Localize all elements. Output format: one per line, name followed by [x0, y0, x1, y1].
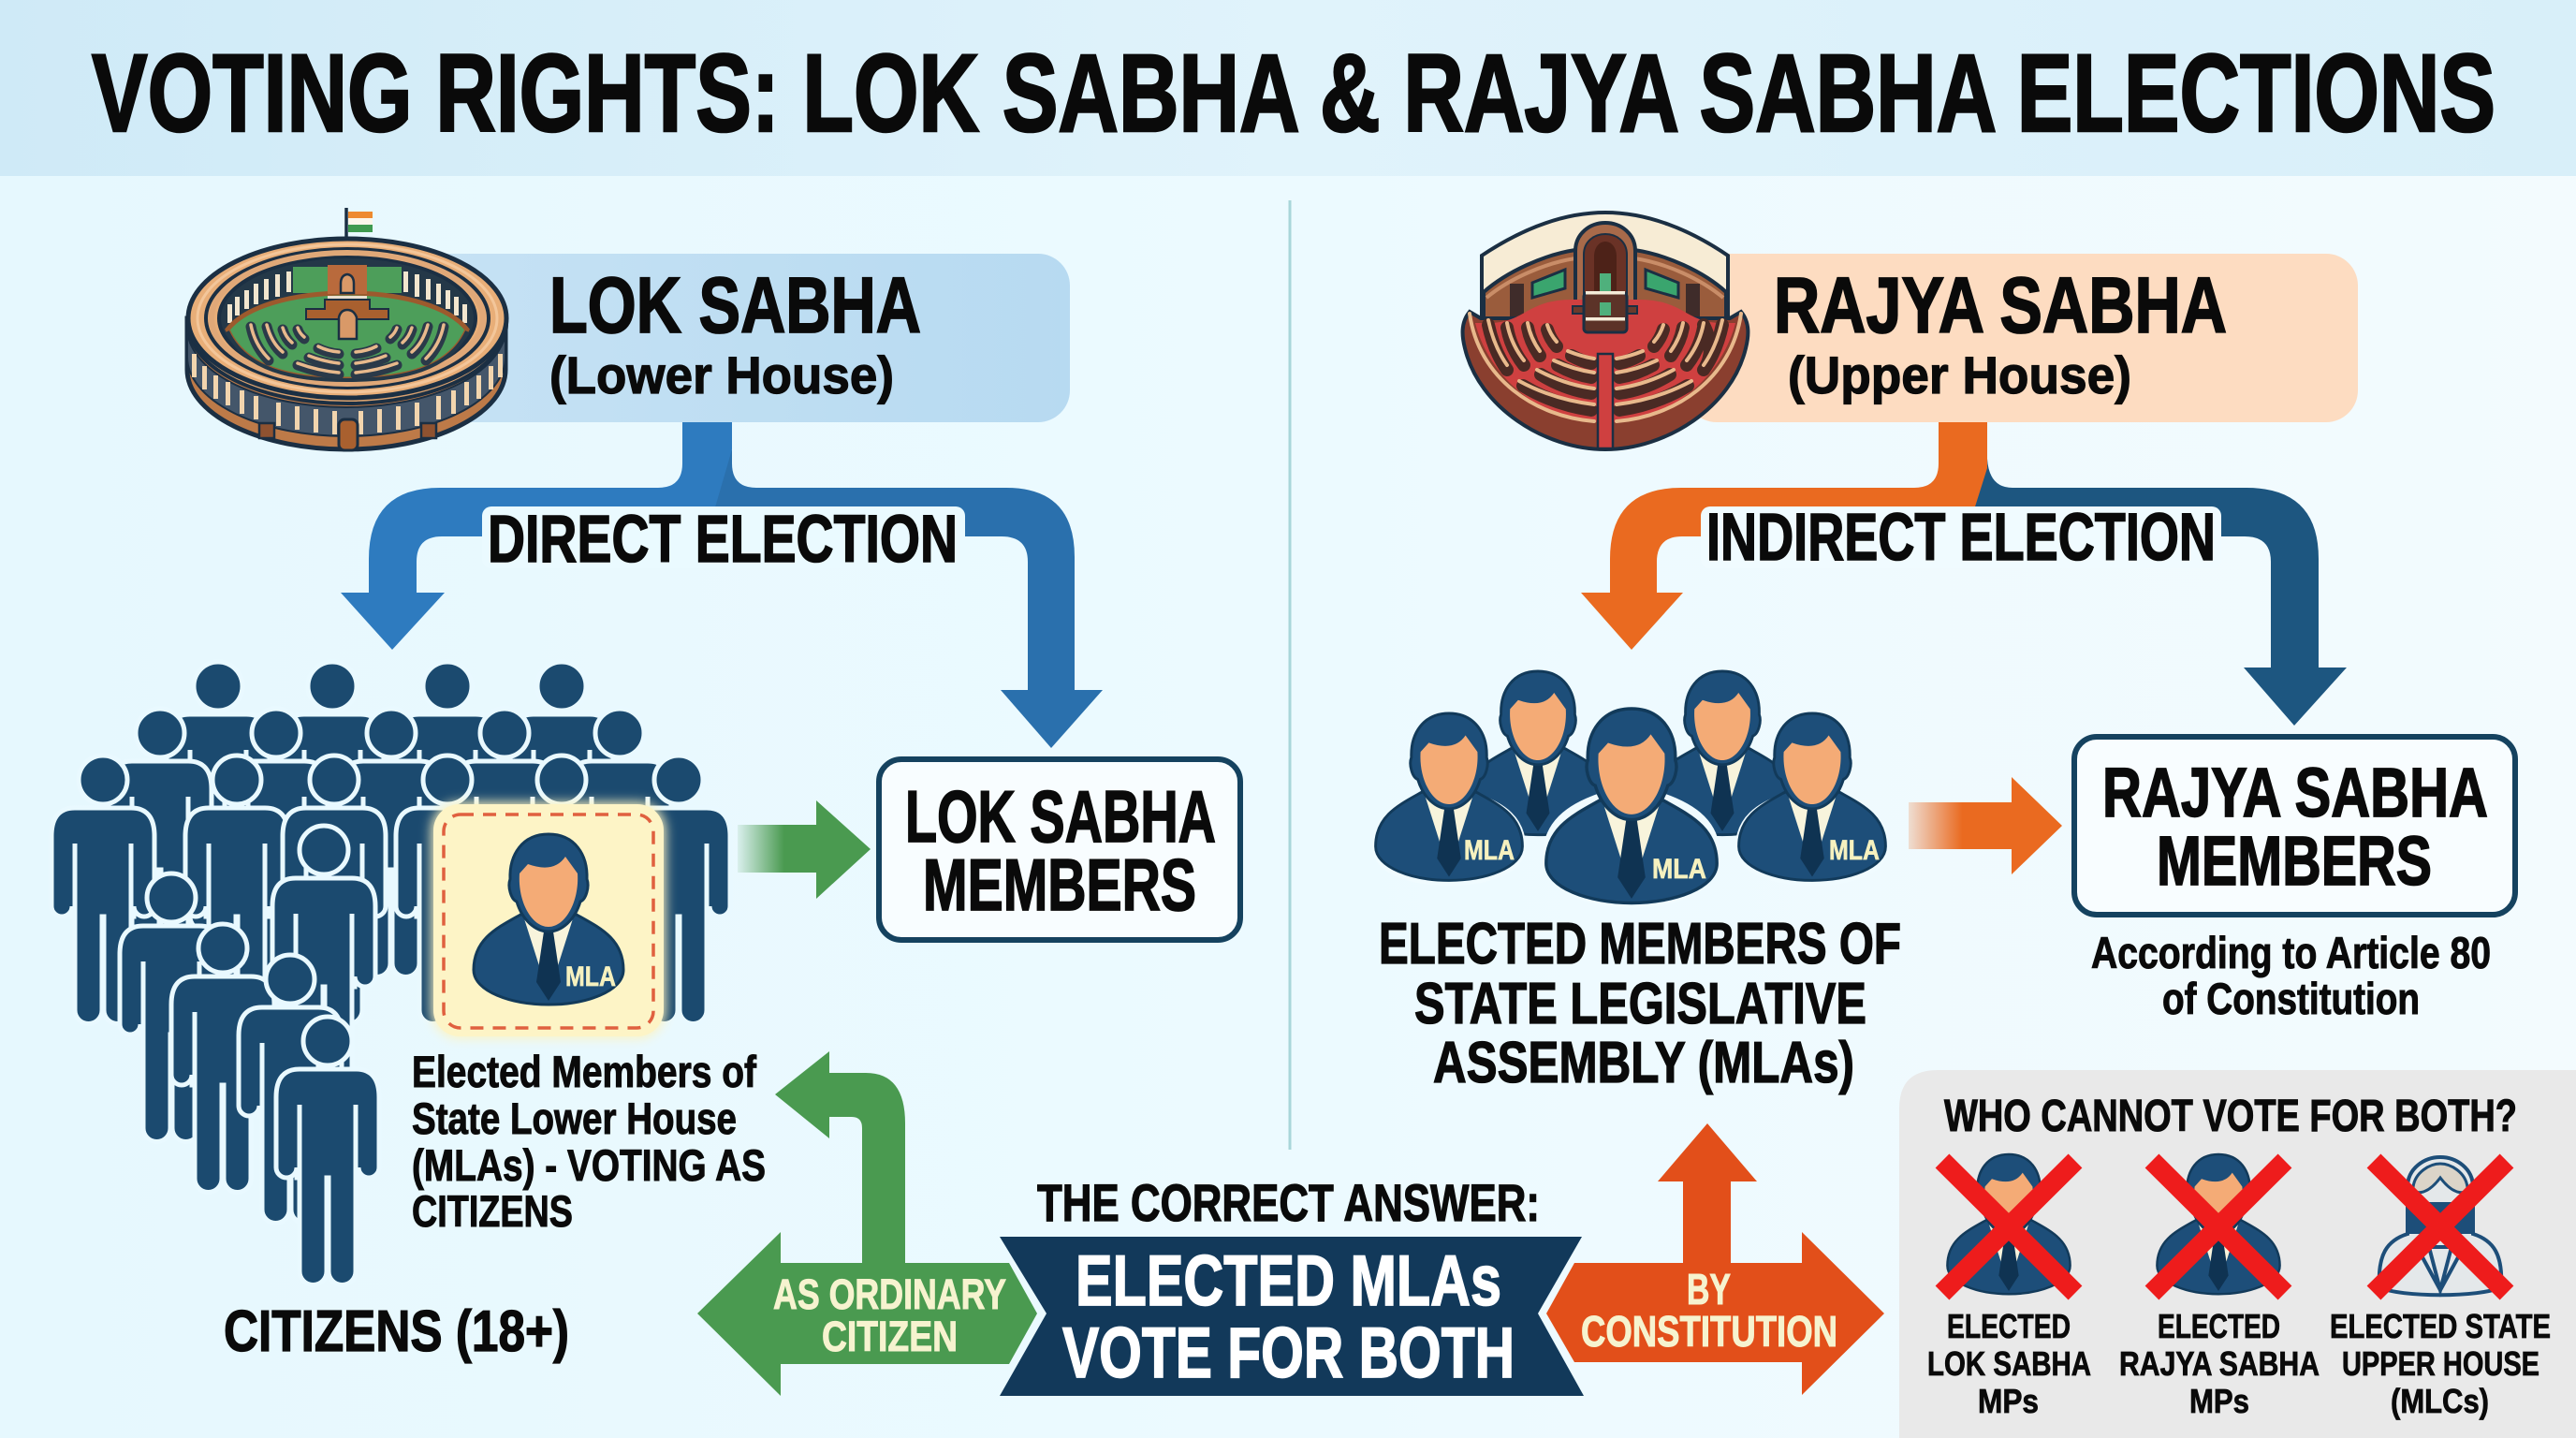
heading: rajya sabha: RAJYA SABHA — [1774, 261, 2227, 349]
box: rajya sabha members: MEMBERS — [2157, 822, 2432, 900]
label: elected rajya sabha MPs: ELECTED — [2158, 1307, 2280, 1345]
heading: lok sabha: LOK SABHA — [549, 261, 921, 349]
label: elected lok sabha MPs: ELECTED — [1947, 1307, 2071, 1345]
label: elected lok sabha MPs — [1927, 1307, 2091, 1420]
arrow: as ordinary citizen — [697, 1051, 1037, 1396]
box: rajya sabha members — [2074, 737, 2515, 915]
label: direct election: DIRECT ELECTION — [488, 503, 958, 577]
callout: MLA voting as citizen: MLA — [565, 961, 616, 992]
label: indirect election: INDIRECT ELECTION — [1706, 501, 2216, 575]
heading: the correct answer: THE CORRECT ANSWER: — [1037, 1173, 1540, 1232]
text: according to article 80 — [2091, 928, 2491, 1023]
text: MLA caption: CITIZENS — [412, 1186, 573, 1236]
text: MLA caption: (MLAs) - VOTING AS — [412, 1140, 766, 1190]
icon: lok sabha MP crossed out — [1942, 1154, 2075, 1294]
arrow: MLAs to rajya sabha members — [1909, 777, 2062, 874]
icon: group of MLAs: MLA — [1829, 835, 1880, 866]
arrow: direct election split — [341, 422, 1103, 748]
icon: MLC crossed out — [2374, 1157, 2507, 1295]
subheading: lower house: (Lower House) — [549, 345, 894, 404]
label: elected lok sabha MPs: MPs — [1978, 1382, 2039, 1420]
icon: group of MLAs: MLA — [1464, 835, 1515, 866]
text: MLA caption: State Lower House — [412, 1093, 737, 1143]
box: lok sabha members: LOK SABHA — [905, 775, 1216, 858]
icon: group of MLAs: MLA — [1652, 854, 1706, 885]
panel: rajya sabha header — [1463, 213, 2358, 449]
text: according to article 80: According to Article 80 — [2091, 928, 2491, 977]
text: MLA caption: Elected Members of — [412, 1047, 756, 1096]
text: according to article 80: of Constitution — [2162, 974, 2420, 1023]
icon: group of MLAs — [1375, 671, 1886, 905]
text: MLA caption — [412, 1047, 766, 1236]
arrow: indirect election split — [1581, 422, 2347, 726]
arrow: by constitution: BY — [1687, 1265, 1731, 1313]
label: elected state upper house MLCs — [2330, 1307, 2551, 1420]
icon: lok sabha building — [187, 208, 506, 450]
box: lok sabha members: MEMBERS — [923, 844, 1196, 926]
arrow: citizens to lok sabha members — [738, 800, 871, 899]
label: elected rajya sabha MPs: MPs — [2189, 1382, 2249, 1420]
label: elected rajya sabha MPs: RAJYA SABHA — [2119, 1344, 2320, 1383]
text: elected members of state legislative assembly: STATE LEGISLATIVE — [1414, 972, 1866, 1036]
label: elected lok sabha MPs: LOK SABHA — [1927, 1344, 2091, 1383]
arrow: as ordinary citizen: AS ORDINARY — [773, 1270, 1006, 1318]
callout: MLA voting as citizen — [432, 802, 666, 1038]
box: lok sabha members — [879, 759, 1240, 940]
arrow: by constitution: CONSTITUTION — [1581, 1307, 1837, 1356]
banner: elected MLAs vote for both — [1000, 1237, 1584, 1396]
arrow: as ordinary citizen: CITIZEN — [822, 1313, 958, 1360]
panel: who cannot vote for both — [1899, 1070, 2576, 1438]
text: elected members of state legislative assembly: ASSEMBLY (MLAs) — [1433, 1031, 1854, 1095]
text: elected members of state legislative assembly — [1379, 912, 1901, 1095]
icon: rajya sabha chamber — [1463, 213, 1748, 449]
label: citizens 18+: CITIZENS (18+) — [224, 1299, 569, 1364]
banner: elected MLAs vote for both: VOTE FOR BOTH — [1062, 1313, 1515, 1393]
label: elected state upper house MLCs: (MLCs) — [2391, 1382, 2489, 1420]
arrow: by constitution — [1546, 1123, 1884, 1395]
icon: rajya sabha MP crossed out — [2152, 1154, 2285, 1294]
text: elected members of state legislative assembly: ELECTED MEMBERS OF — [1379, 912, 1901, 976]
panel: lok sabha header — [187, 208, 1070, 450]
banner: elected MLAs vote for both: ELECTED MLAs — [1076, 1241, 1501, 1321]
label: elected rajya sabha MPs — [2119, 1307, 2320, 1420]
title band — [0, 0, 2576, 176]
subheading: upper house: (Upper House) — [1788, 345, 2131, 404]
citizens crowd — [51, 662, 730, 1284]
